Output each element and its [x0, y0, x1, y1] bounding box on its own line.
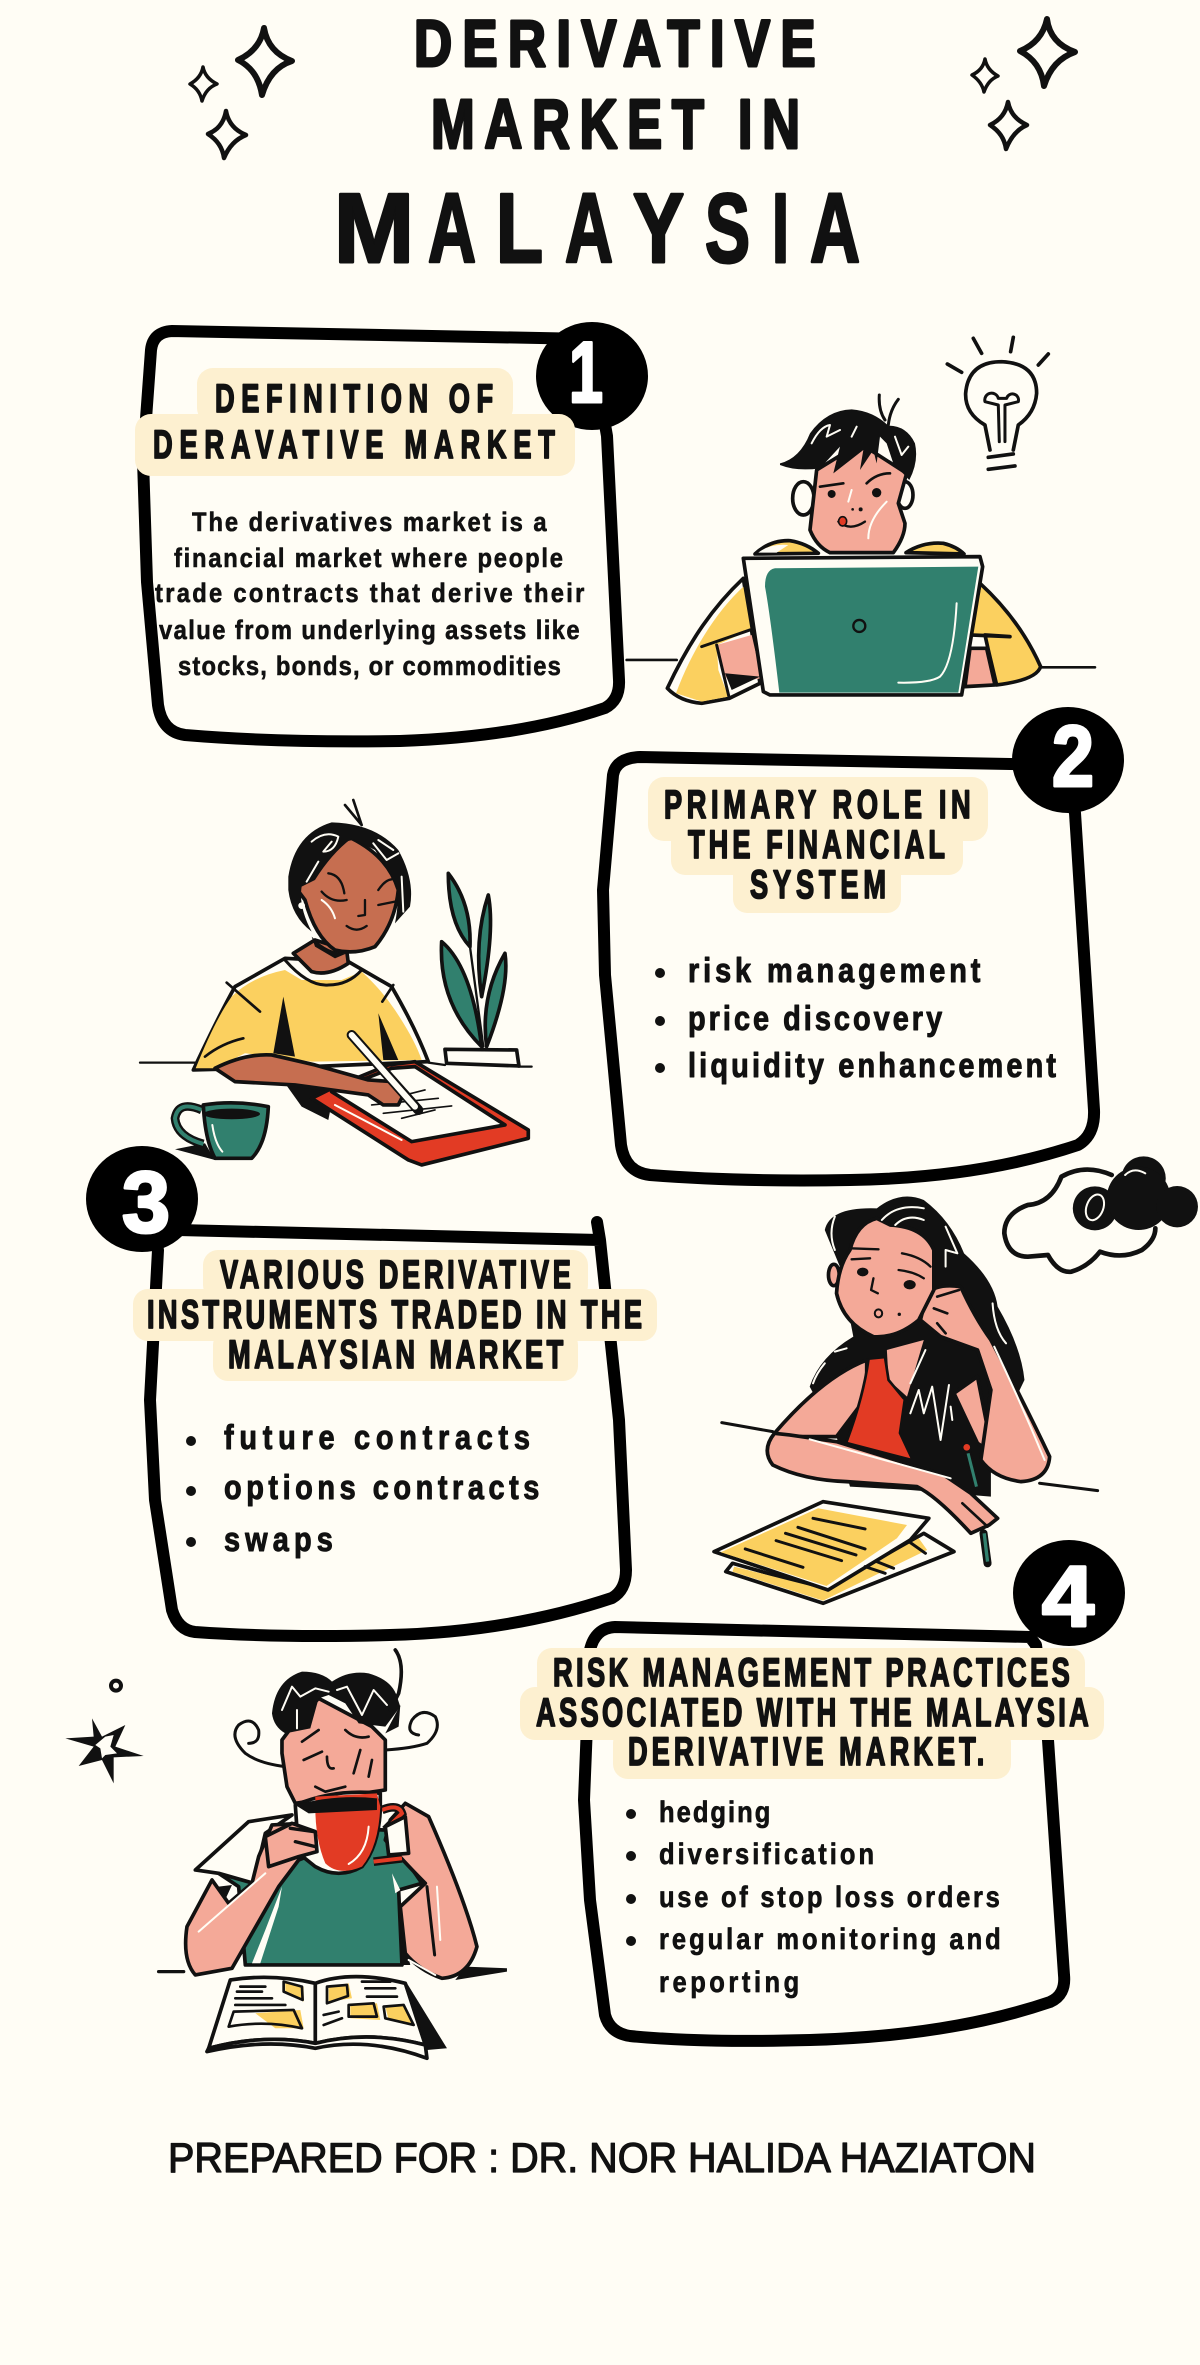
- steam: [235, 1712, 437, 1767]
- badge 2: 2: [1052, 709, 1094, 805]
- list 2: risk management: [688, 951, 981, 990]
- title: S: [705, 173, 750, 283]
- panel 3 outline: [150, 1222, 626, 1636]
- tablet: [312, 1062, 528, 1165]
- body text 1: trade contracts that derive their: [155, 579, 585, 608]
- body text 1: value from underlying assets like: [159, 616, 580, 645]
- heading 4: ASSOCIATED WITH THE MALAYSIA: [536, 1691, 1089, 1735]
- arm and hand: [215, 1055, 405, 1105]
- list 3: future contracts: [224, 1418, 530, 1457]
- heading 1: [135, 368, 575, 476]
- list 3: [186, 1418, 539, 1559]
- heading 2: PRIMARY ROLE IN: [664, 783, 971, 827]
- illustration: man with laptop: [627, 395, 1095, 703]
- title: [334, 6, 860, 283]
- title: L: [496, 173, 543, 283]
- heading 4: DERIVATIVE MARKET.: [628, 1730, 984, 1774]
- badge 3: 3: [122, 1155, 170, 1251]
- list 4: diversification: [659, 1837, 874, 1870]
- body text 1: financial market where people: [174, 544, 563, 573]
- badge 1: 1: [569, 325, 603, 421]
- heading 2: [648, 777, 988, 913]
- heading 4: RISK MANAGEMENT PRACTICES: [553, 1651, 1070, 1695]
- badge 2: [1012, 707, 1124, 813]
- badge 3: [86, 1146, 198, 1252]
- panel 2 outline: [603, 757, 1094, 1180]
- illustration: woman thinking with thought cloud: [714, 1156, 1198, 1603]
- badge 1: [536, 322, 648, 430]
- badge 4: [1013, 1540, 1125, 1646]
- heading 3: MALAYSIAN MARKET: [228, 1333, 563, 1377]
- title: MARKET IN: [431, 86, 800, 164]
- plant: [441, 873, 519, 1066]
- body text 1: stocks, bonds, or commodities: [178, 652, 561, 681]
- title: A: [810, 173, 860, 283]
- list 4: hedging: [659, 1795, 770, 1828]
- title: A: [428, 173, 476, 283]
- list 3: options contracts: [224, 1468, 539, 1507]
- list 2: [655, 951, 1056, 1085]
- papers: [714, 1502, 954, 1603]
- panel 1: definition: [135, 322, 648, 741]
- title: I: [772, 173, 789, 283]
- list 4: reporting: [659, 1965, 799, 1998]
- illustration: woman writing on tablet: [140, 800, 532, 1165]
- badge 4: 4: [1042, 1549, 1094, 1645]
- heading 3: VARIOUS DERIVATIVE: [220, 1253, 571, 1297]
- list 2: price discovery: [688, 999, 943, 1038]
- heading 3: [133, 1250, 657, 1381]
- body text 1: The derivatives market is a: [192, 508, 547, 537]
- panel 3: instruments: [86, 1146, 657, 1636]
- icon: light bulb: [947, 337, 1048, 469]
- panel 1 outline: [143, 331, 619, 741]
- mug: [175, 1103, 268, 1160]
- icon: star and ring: [65, 1681, 144, 1783]
- pencil: [963, 1444, 988, 1563]
- list 4: use of stop loss orders: [659, 1880, 1000, 1913]
- panel 4 outline: [584, 1627, 1064, 2041]
- footer: prepared for: PREPARED FOR : DR. NOR HALIDA HAZIATON: [168, 2134, 1036, 2181]
- title: M: [334, 173, 414, 283]
- panel 2: primary role: [603, 707, 1124, 1180]
- list 2: liquidity enhancement: [688, 1046, 1056, 1085]
- thought cloud: [1004, 1156, 1198, 1272]
- heading 1: DERAVATIVE MARKET: [153, 423, 555, 467]
- title: DERIVATIVE: [414, 6, 816, 80]
- heading 4: [520, 1648, 1104, 1779]
- heading 1: DEFINITION OF: [215, 377, 493, 421]
- open book: [207, 1977, 447, 2058]
- coffee cup: [295, 1792, 402, 1873]
- icon: sparkles right: [972, 19, 1075, 149]
- list 3: swaps: [224, 1520, 333, 1559]
- heading 2: THE FINANCIAL: [688, 823, 945, 867]
- icon: sparkles left: [190, 28, 292, 158]
- heading 3: INSTRUMENTS TRADED IN THE: [147, 1293, 642, 1337]
- title: A: [565, 173, 613, 283]
- list 4: [626, 1795, 1001, 1998]
- list 4: regular monitoring and: [659, 1922, 1001, 1955]
- title: Y: [633, 173, 684, 283]
- heading 2: SYSTEM: [750, 863, 886, 907]
- panel 4: risk management: [520, 1540, 1125, 2041]
- illustration: man drinking coffee with open book: [65, 1650, 507, 2058]
- body text 1: [155, 508, 585, 681]
